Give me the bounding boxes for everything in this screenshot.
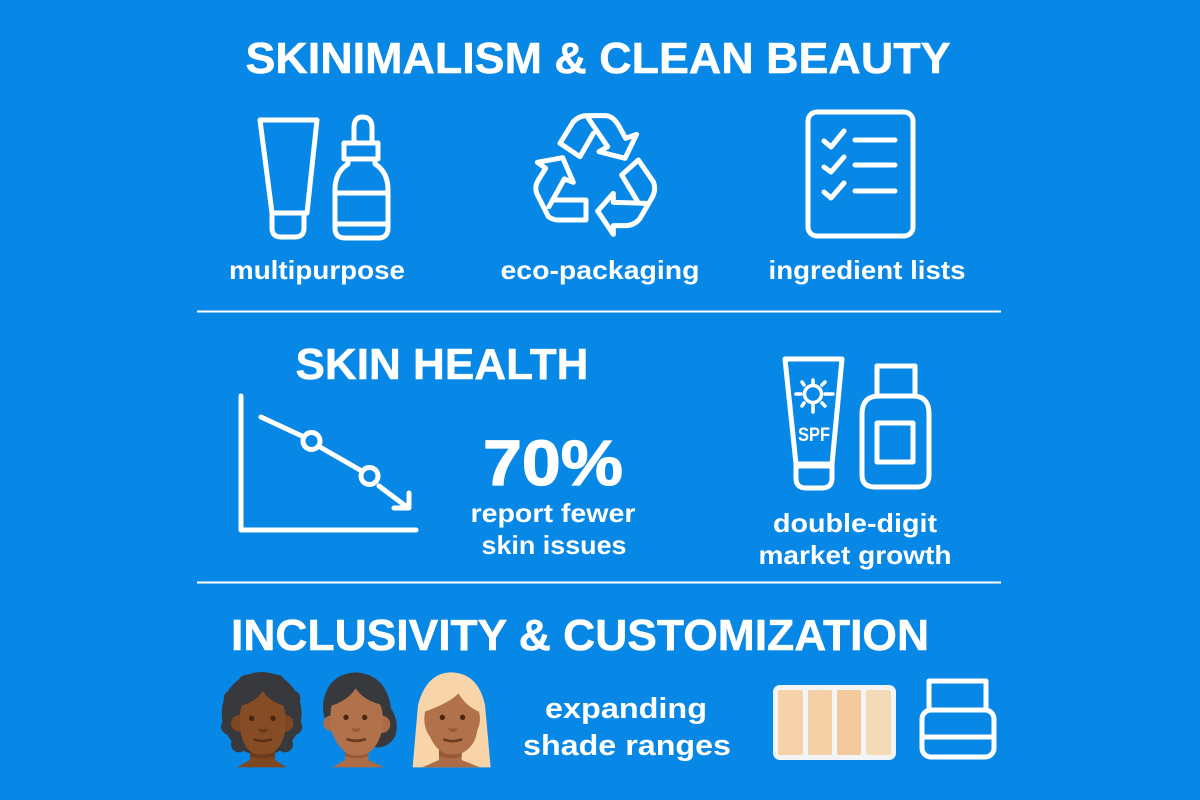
face three: long blonde hair xyxy=(413,672,491,767)
face one: curly hair xyxy=(221,672,302,767)
stat: 70 percent: 70% xyxy=(483,427,623,499)
caption: expanding shade ranges: expanding xyxy=(545,693,707,725)
SPF label: SPF xyxy=(798,425,830,446)
chart: declining line xyxy=(241,396,416,530)
caption: report fewer skin issues: skin issues xyxy=(482,530,626,560)
caption: double-digit market growth: double-digit xyxy=(773,508,937,538)
face two: hair bun xyxy=(323,672,397,767)
caption: expanding shade ranges: shade ranges xyxy=(523,730,731,762)
caption: report fewer skin issues: report fewer xyxy=(470,498,636,528)
title: skinimalism and clean beauty: SKINIMALISM & CLEAN BEAUTY xyxy=(246,34,950,83)
caption: report fewer skin issues xyxy=(470,498,636,560)
heading: skin health: SKIN HEALTH xyxy=(296,340,588,389)
shade palette xyxy=(773,685,896,760)
icon: sunscreen tube and bottle xyxy=(785,359,929,488)
label: multipurpose: multipurpose xyxy=(229,255,405,285)
caption: expanding shade ranges xyxy=(523,693,731,762)
icon: recycling arrows xyxy=(536,116,655,234)
icon: checklist xyxy=(808,112,913,236)
caption: double-digit market growth: market growth xyxy=(758,540,952,570)
caption: double-digit market growth xyxy=(758,508,952,570)
label: eco-packaging: eco-packaging xyxy=(500,255,700,285)
icon: tube and dropper bottle xyxy=(260,117,388,238)
label: ingredient lists: ingredient lists xyxy=(768,255,966,285)
heading: inclusivity and customization: INCLUSIVITY & CUSTOMIZATION xyxy=(231,611,929,660)
icon: cream jar xyxy=(922,681,994,757)
